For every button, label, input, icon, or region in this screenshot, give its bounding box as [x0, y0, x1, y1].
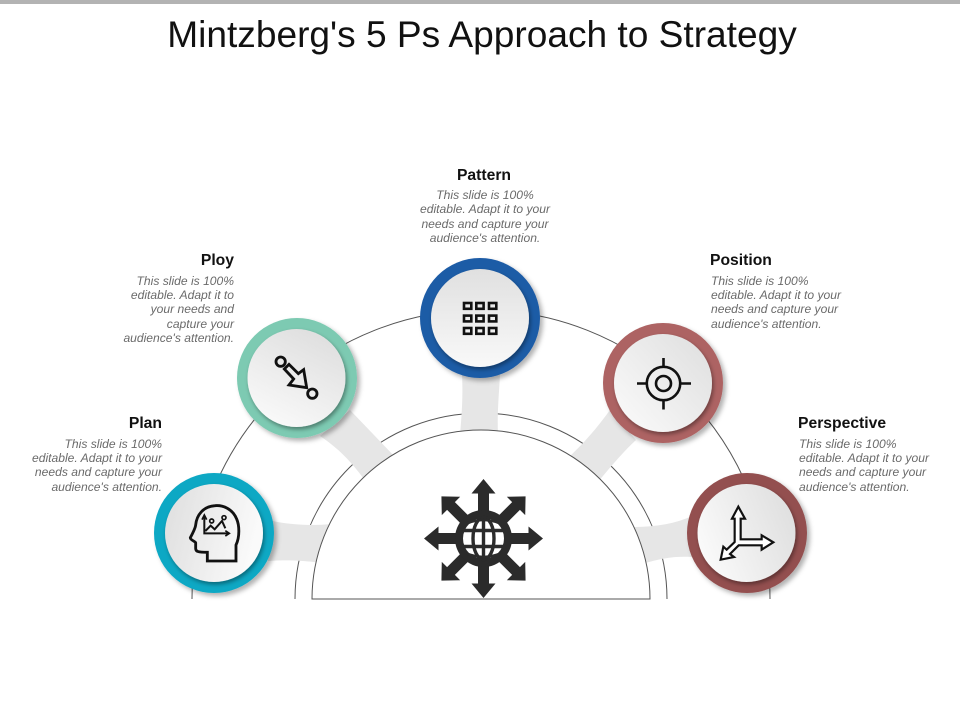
label: plan: audience's attention. [51, 480, 162, 494]
node: plan [154, 473, 274, 593]
globe grid [463, 518, 504, 559]
label: pattern: audience's attention. [430, 231, 540, 245]
label: position: This slide is 100% [711, 274, 809, 288]
label: perspective [798, 415, 930, 494]
node: pattern [420, 258, 540, 378]
label: ploy: This slide is 100% [137, 274, 234, 288]
title: Mintzberg's 5 Ps Approach to Strategy [167, 13, 797, 55]
outer arc [192, 310, 770, 599]
top bar [0, 0, 960, 4]
middle arc [295, 413, 667, 599]
label: perspective: This slide is 100% [799, 437, 897, 451]
icon: head with chart [190, 506, 239, 561]
label: perspective: Perspective [798, 415, 886, 432]
label: pattern: needs and capture your [421, 217, 550, 231]
node: ploy [237, 318, 357, 438]
label: perspective: editable. Adapt it to your [799, 451, 930, 465]
label: pattern [420, 167, 551, 245]
label: plan: needs and capture your [35, 465, 163, 479]
central icon: globe with arrows [424, 479, 543, 598]
label: position: audience's attention. [711, 317, 822, 331]
label: pattern: editable. Adapt it to your [420, 202, 551, 216]
icon: target [637, 358, 691, 410]
connector: ploy [320, 410, 396, 482]
node: perspective [687, 473, 807, 593]
label: ploy: your needs and [150, 302, 235, 316]
label: position [710, 252, 842, 331]
label: perspective: audience's attention. [799, 480, 910, 494]
connector: plan [268, 520, 332, 563]
label: perspective: needs and capture your [799, 465, 927, 479]
label: ploy: audience's attention. [123, 331, 234, 345]
label: ploy: capture your [167, 317, 235, 331]
label: pattern: Pattern [457, 167, 511, 184]
label: plan: editable. Adapt it to your [32, 451, 163, 465]
connectors [268, 374, 692, 564]
icon: grid [464, 303, 496, 334]
icon: three arrows [721, 507, 773, 560]
label: position: Position [710, 252, 772, 269]
connector: pattern [460, 374, 500, 435]
label: ploy [123, 252, 235, 345]
label: pattern: This slide is 100% [436, 188, 534, 202]
arrows [424, 479, 543, 598]
label: plan [32, 415, 163, 494]
connector: perspective [632, 516, 692, 564]
icon: arrow between points [276, 357, 317, 398]
connector: position [567, 410, 636, 482]
label: plan: Plan [129, 415, 162, 432]
label: ploy: Ploy [201, 252, 234, 269]
node: position [603, 323, 723, 443]
inner semicircle [312, 430, 650, 599]
label: plan: This slide is 100% [65, 437, 162, 451]
label: ploy: editable. Adapt it to [131, 288, 234, 302]
label: position: needs and capture your [711, 302, 839, 316]
label: position: editable. Adapt it to your [711, 288, 842, 302]
